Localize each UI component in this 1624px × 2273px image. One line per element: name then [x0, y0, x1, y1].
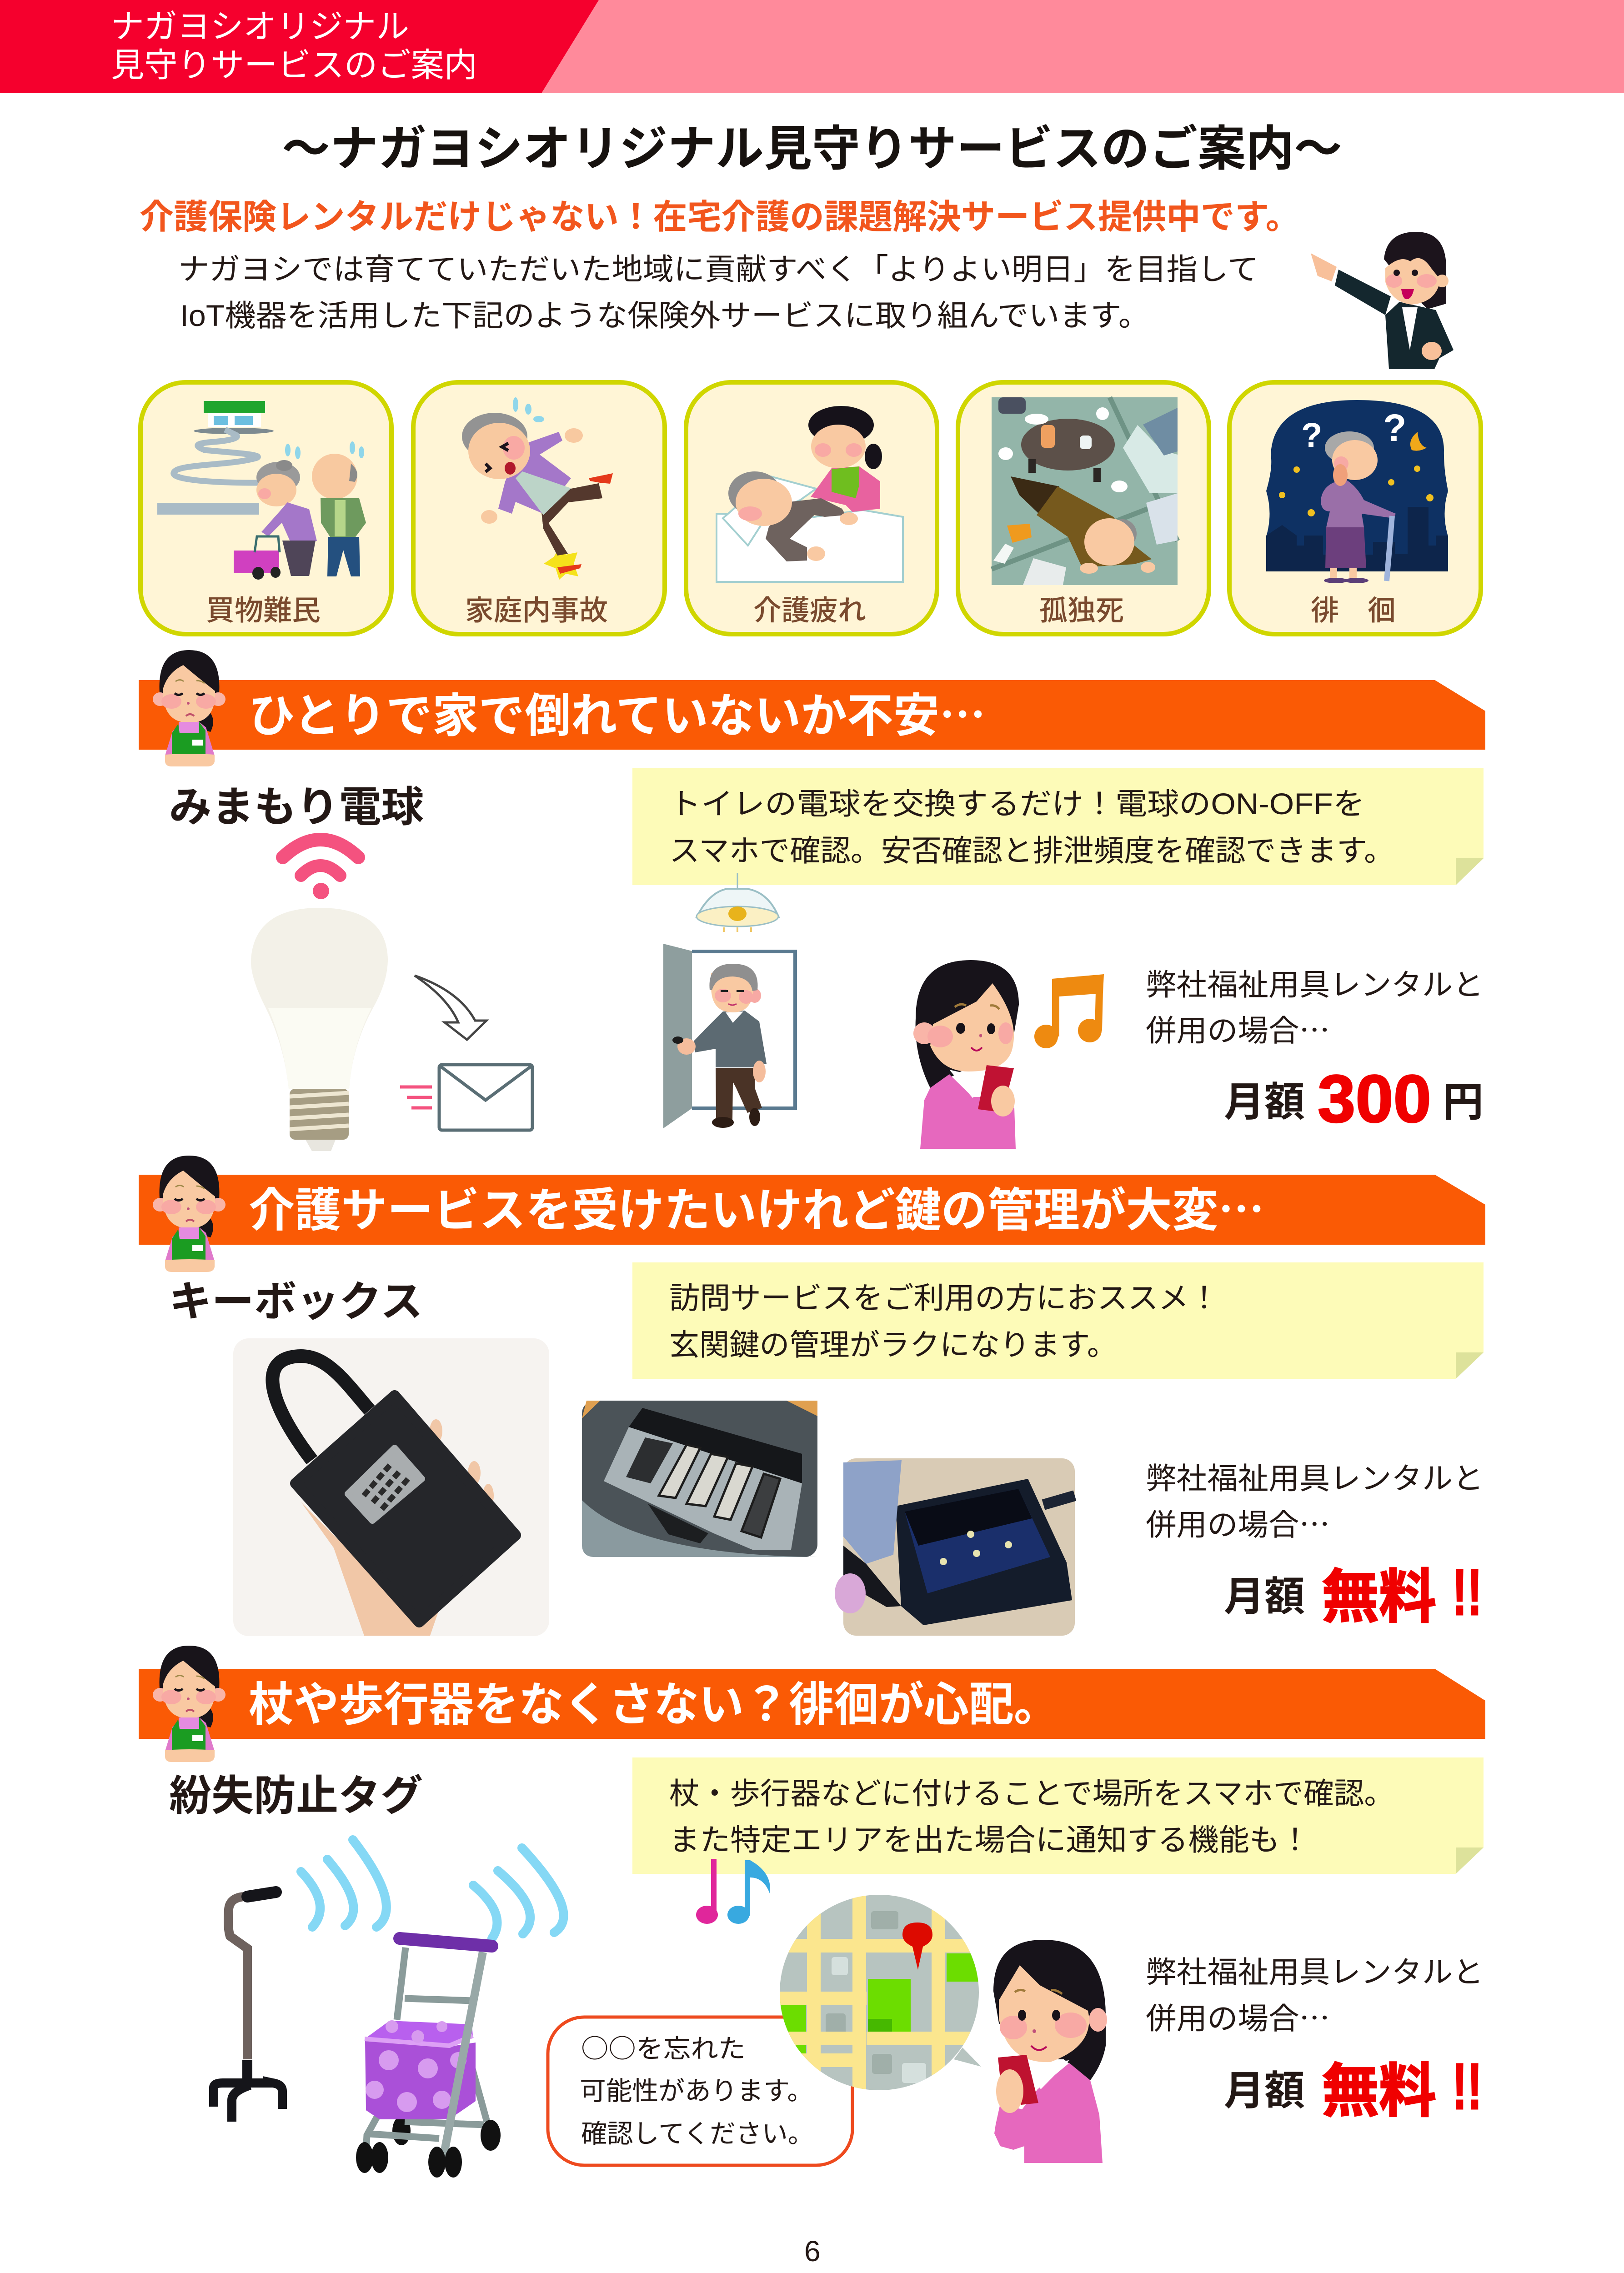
icon: worried woman	[153, 650, 226, 766]
rental text: 弊社福祉用具レンタルと	[1146, 968, 1484, 1001]
price: 無料	[1322, 2059, 1436, 2124]
icon: music note	[1034, 974, 1104, 1048]
product name: キーボックス	[169, 1279, 423, 1325]
note: 杖・歩行器などに付けることで場所をスマホで確認。	[669, 1777, 1394, 1810]
rental text: 弊社福祉用具レンタルと	[1146, 1955, 1484, 1989]
card: 孤独死	[958, 382, 1209, 634]
price: !!	[1452, 2050, 1482, 2123]
label: 孤独死	[1039, 595, 1124, 626]
rental text: 併用の場合…	[1146, 1501, 1329, 1544]
label: 介護疲れ	[753, 595, 866, 626]
arrow	[415, 976, 486, 1040]
rental text: 弊社福祉用具レンタルと	[1146, 1462, 1484, 1495]
banner	[139, 680, 1485, 750]
icon: envelope	[400, 1065, 532, 1130]
price: 月額	[1224, 1574, 1305, 1619]
icon: wandering at night	[1266, 400, 1448, 583]
icon: woman with phone	[913, 960, 1019, 1149]
icon: walking cane	[214, 1892, 282, 2122]
note: 玄関鍵の管理がラクになります。	[669, 1328, 1117, 1362]
icon: worried woman	[153, 1156, 226, 1272]
callout: speech bubble	[548, 2017, 852, 2165]
callout: speech bubble: 確認してください。	[581, 2119, 814, 2148]
section 1: みまもり電球	[139, 650, 1485, 1151]
price	[1224, 1061, 1484, 1136]
rental text: 併用の場合…	[1146, 1994, 1329, 2038]
note: スマホで確認。安否確認と排泄頻度を確認できます。	[669, 834, 1394, 867]
callout: speech bubble: ○○を忘れた	[581, 2028, 740, 2065]
intro text: ナガヨシでは育てていただいた地域に貢献すべく「よりよい明日」を目指して	[178, 252, 1258, 286]
banner	[139, 1175, 1485, 1245]
note	[632, 1757, 1484, 1874]
price: 月額	[1224, 1079, 1305, 1125]
panel: problem cards	[140, 382, 1481, 634]
page number: 6	[804, 2235, 821, 2268]
price: !!	[1452, 1556, 1482, 1629]
price: 300	[1318, 1061, 1431, 1136]
note: また特定エリアを出た場合に通知する機能も！	[669, 1823, 1310, 1857]
note: 訪問サービスをご利用の方におススメ！	[669, 1281, 1219, 1315]
orange subtitle: 介護保険レンタルだけじゃない！在宅介護の課題解決サービス提供中です。	[140, 198, 1300, 236]
icon: wandering at night: ?	[1383, 406, 1406, 449]
icon: woman with phone	[993, 1940, 1107, 2163]
label: 徘 徊	[1311, 595, 1396, 626]
icon: worried woman	[153, 1646, 226, 1762]
banner	[139, 1669, 1485, 1739]
icon: walker	[356, 1938, 501, 2178]
icon: elderly woman tripping	[462, 397, 613, 580]
product name: みまもり電球	[169, 784, 424, 831]
note	[632, 1262, 1484, 1379]
icon: wifi signal	[283, 840, 358, 899]
price	[1224, 2050, 1482, 2124]
price: 無料	[1322, 1565, 1436, 1630]
header band	[0, 0, 1624, 93]
rental text: 併用の場合…	[1146, 1006, 1329, 1050]
icon: supermarket and elderly couple	[157, 401, 366, 580]
intro text: IoT機器を活用した下記のような保険外サービスに取り組んでいます。	[180, 299, 1149, 332]
card: 徘徊	[1229, 382, 1481, 634]
icon: signal waves	[301, 1840, 564, 1938]
banner text: 介護サービスを受けたいけれど鍵の管理が大変…	[249, 1173, 1264, 1240]
banner text: 杖や歩行器をなくさない？徘徊が心配。	[249, 1679, 1059, 1731]
label: 家庭内事故	[465, 595, 608, 626]
price: 月額	[1224, 2068, 1305, 2113]
card: 買物難民	[140, 382, 391, 634]
callout: speech bubble: 可能性があります。	[580, 2077, 813, 2106]
icon: man collapsed on floor	[992, 397, 1178, 585]
header title: ナガヨシオリジナル	[111, 8, 409, 45]
icon: music notes	[696, 1859, 770, 1924]
card: 介護疲れ	[686, 382, 937, 634]
icon: pointing woman	[1311, 232, 1454, 369]
section 2: キーボックス	[139, 1156, 1485, 1636]
icon: map bubble	[773, 1891, 987, 2096]
icon: tired carer and bedridden man	[717, 406, 903, 582]
card: 家庭内事故	[413, 382, 665, 634]
main title: 〜ナガヨシオリジナル見守りサービスのご案内〜	[282, 122, 1342, 176]
label: 買物難民	[206, 595, 321, 626]
banner text: ひとりで家で倒れていないか不安…	[249, 679, 986, 746]
icon: door and elderly man	[663, 944, 795, 1128]
header title: 見守りサービスのご案内	[111, 47, 477, 84]
product name: 紛失防止タグ	[169, 1773, 423, 1819]
photo: combination dial	[582, 1401, 817, 1557]
icon: light bulb	[251, 908, 388, 1151]
price	[1224, 1556, 1482, 1630]
photo: key box in hand	[233, 1338, 549, 1636]
photo: inside of key box	[835, 1458, 1075, 1636]
note: トイレの電球を交換するだけ！電球のON-OFFを	[669, 787, 1365, 821]
icon: wandering at night: ?	[1301, 416, 1322, 455]
note	[632, 768, 1484, 885]
icon: ceiling lamp	[697, 873, 779, 932]
price: 円	[1443, 1080, 1484, 1125]
section 3: 紛失防止タグ	[139, 1646, 1485, 2178]
